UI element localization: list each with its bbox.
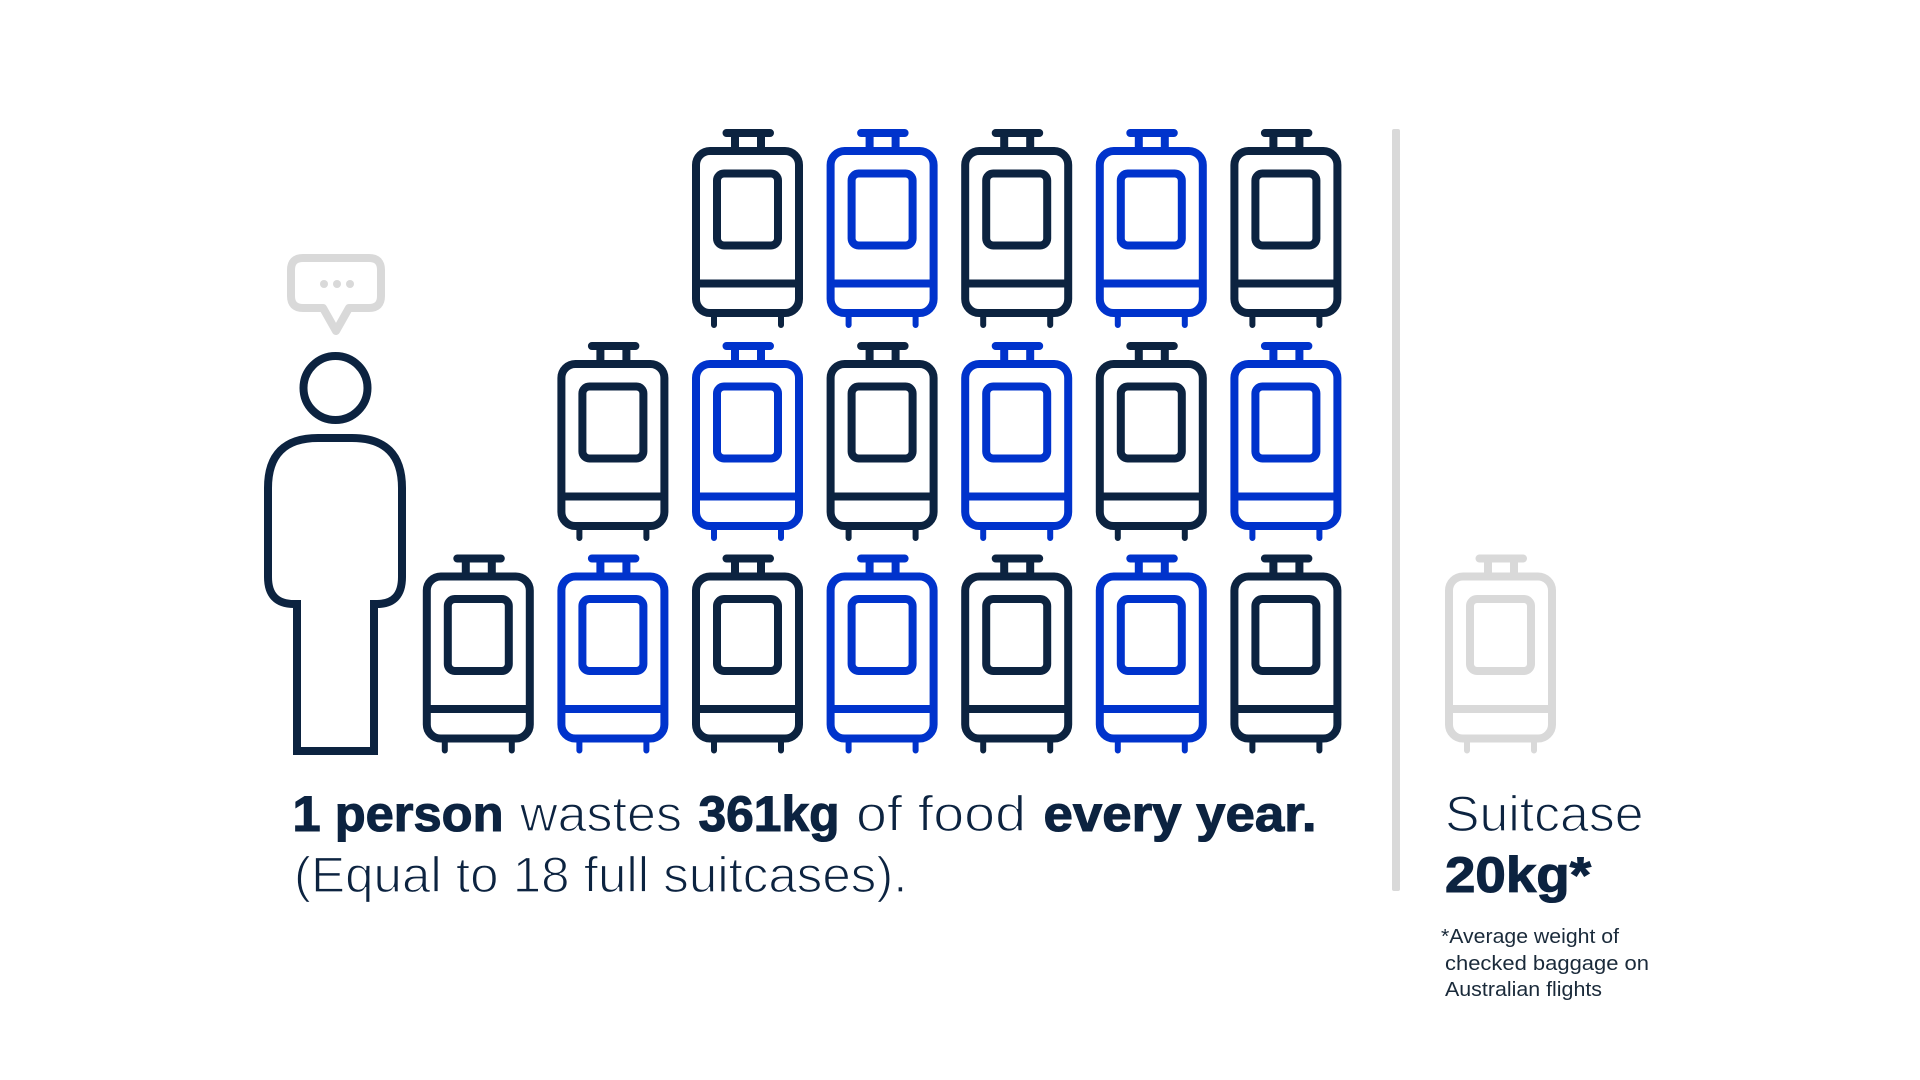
headline statement: (Equal to 18 full suitcases). xyxy=(294,847,908,903)
icon: person xyxy=(268,356,402,751)
icon: grey reference suitcase xyxy=(1449,558,1552,750)
suitcase weight label: 20kg* xyxy=(1445,847,1592,903)
suitcase weight label: Suitcase xyxy=(1445,786,1644,842)
headline statement: 1 person xyxy=(292,786,504,842)
icon: speech bubble xyxy=(291,258,381,331)
suitcases: top row xyxy=(696,133,1337,325)
divider xyxy=(1392,129,1400,891)
headline statement: every year. xyxy=(1044,786,1316,842)
headline statement: 361kg xyxy=(698,786,840,842)
headline statement: wastes xyxy=(519,786,682,842)
footnote xyxy=(1441,926,1649,1001)
suitcases: bottom row xyxy=(427,558,1337,750)
footnote: *Average weight of xyxy=(1441,926,1619,948)
headline statement: of food xyxy=(856,786,1026,842)
suitcases: middle row xyxy=(561,346,1337,538)
headline statement xyxy=(292,786,1316,903)
footnote: Australian flights xyxy=(1445,979,1602,1001)
suitcase weight label xyxy=(1445,786,1644,903)
footnote: checked baggage on xyxy=(1445,953,1649,975)
